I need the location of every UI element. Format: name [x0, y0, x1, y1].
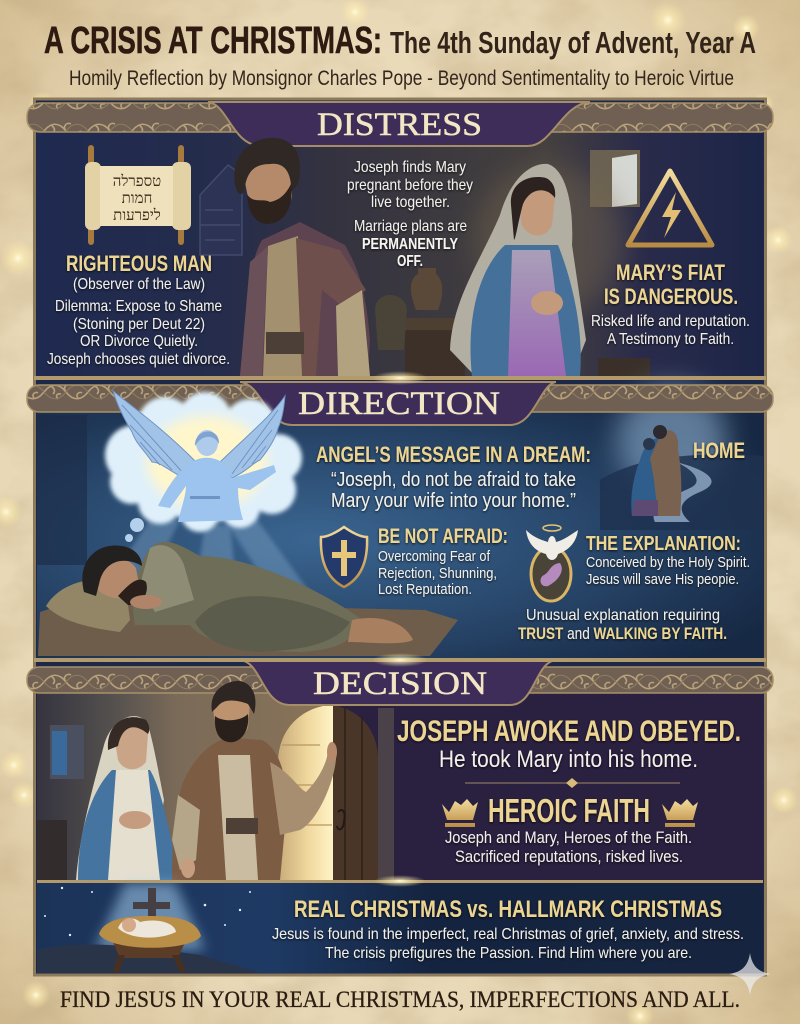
text block: joseph finds mary: live together.	[371, 194, 450, 211]
text block: righteous man: Dilemma: Expose to Shame	[55, 298, 222, 315]
text block: joseph finds mary	[347, 159, 473, 270]
title	[44, 20, 756, 62]
text block: righteous man	[47, 251, 230, 368]
header band	[27, 660, 773, 705]
icon: warning triangle	[628, 171, 712, 245]
section heading: DISTRESS	[317, 107, 482, 143]
footer message: FIND JESUS IN YOUR REAL CHRISTMAS, IMPERFECTIONS AND ALL.	[60, 987, 740, 1012]
icon: manger with baby	[99, 916, 201, 972]
text block: mary's fiat: A Testimony to Faith.	[607, 331, 734, 348]
icon: cross	[133, 888, 170, 925]
panel: distress	[27, 102, 773, 377]
text block: heroes of the faith: Sacrificed reputations, risked lives.	[455, 847, 683, 866]
header band	[27, 382, 773, 425]
text block: mary's fiat: Risked life and reputation.	[591, 313, 750, 330]
outer frame	[34, 99, 766, 975]
text block: angel's message	[316, 442, 591, 512]
decision background	[37, 692, 763, 881]
text block: mary's fiat: MARY’S FIAT	[616, 260, 725, 285]
icon: torah scroll: ליפרעות	[113, 207, 161, 224]
text block: be not afraid	[378, 525, 508, 598]
text block: be not afraid: Lost Reputation.	[378, 581, 472, 598]
text block: joseph awoke: He took Mary into his home.	[439, 746, 698, 773]
icon: torah scroll	[85, 145, 191, 245]
text block: joseph finds mary: Marriage plans are	[354, 218, 467, 235]
icon: dove and locket	[526, 525, 578, 601]
icon: left crown	[442, 799, 478, 827]
text block: trust and walking by faith: TRUST and WALKING BY FAITH.	[518, 624, 727, 643]
title: A CRISIS AT CHRISTMAS:	[44, 20, 382, 62]
text block: mary's fiat	[591, 260, 750, 348]
text block: heroes of the faith: Joseph and Mary, Heroes of the Faith.	[445, 828, 692, 847]
thought bubbles	[125, 518, 144, 542]
text block: the explanation: THE EXPLANATION:	[586, 533, 741, 555]
distress background room	[37, 130, 763, 377]
gold divider line	[34, 653, 766, 667]
ornamental divider	[465, 778, 680, 788]
text block: angel's message: “Joseph, do not be afraid to take	[331, 469, 576, 491]
text block: joseph awoke	[397, 715, 741, 773]
light rays from dream	[70, 510, 330, 640]
text block: righteous man: RIGHTEOUS MAN	[66, 251, 212, 276]
header band	[27, 102, 773, 146]
text block: joseph finds mary: Joseph finds Mary	[354, 159, 466, 176]
text block: trust and walking by faith: Unusual explanation requiring	[526, 607, 720, 624]
figure: mary distressed	[450, 164, 586, 376]
figure: joseph leading mary	[172, 681, 337, 880]
angel wings	[113, 391, 285, 478]
figure: mary at the door	[76, 716, 178, 880]
text block: the explanation: Jesus will save His peopie.	[586, 571, 739, 588]
text block: be not afraid: Overcoming Fear of	[378, 548, 491, 565]
text block: righteous man: (Stoning per Deut 22)	[73, 316, 205, 333]
icon: shield with cross	[321, 527, 367, 587]
icon: right crown	[662, 799, 698, 827]
heading: heroic faith: HEROIC FAITH	[488, 792, 650, 829]
text block: real christmas vs hallmark	[272, 896, 744, 962]
text block: righteous man: OR Divorce Quietly.	[80, 333, 198, 350]
label: home: HOME	[693, 438, 745, 463]
text block: mary's fiat: IS DANGEROUS.	[604, 284, 738, 309]
text block: joseph finds mary: OFF.	[397, 253, 423, 270]
real christmas background	[37, 882, 763, 973]
text block: be not afraid: BE NOT AFRAID:	[378, 525, 508, 548]
text block: heroes of the faith	[445, 828, 692, 866]
text block: joseph finds mary: pregnant before they	[347, 177, 473, 194]
direction background	[37, 385, 763, 658]
section heading: DIRECTION	[298, 386, 500, 422]
figure: embracing couple	[631, 425, 681, 516]
icon: sparkle	[729, 953, 771, 995]
text block: real christmas vs hallmark: Jesus is found in the imperfect, real Christmas of grief, anxiety, and stress.	[272, 926, 744, 943]
text block: real christmas vs hallmark: The crisis prefigures the Passion. Find Him where you are.	[325, 945, 692, 962]
figure: sleeping joseph	[38, 542, 458, 656]
figure: joseph distressed	[234, 138, 370, 376]
text block: angel's message: ANGEL’S MESSAGE IN A DREAM:	[316, 442, 591, 467]
text block: the explanation: Conceived by the Holy Spirit.	[586, 554, 750, 571]
gold divider line	[34, 371, 766, 385]
panel: real christmas	[37, 882, 763, 973]
text block: righteous man: Joseph chooses quiet divorce.	[47, 351, 230, 368]
icon: torah scroll: טספרלה	[113, 173, 161, 190]
text block: joseph finds mary: PERMANENTLY	[362, 236, 458, 253]
text block: trust and walking by faith	[518, 607, 727, 643]
text block: be not afraid: Rejection, Shunning,	[378, 565, 497, 582]
text block: angel's message: Mary your wife into your home.”	[331, 490, 576, 512]
dream cloud with angel	[105, 391, 302, 532]
text block: the explanation	[586, 533, 750, 588]
angel body	[158, 430, 276, 522]
text block: righteous man: (Observer of the Law)	[73, 276, 205, 293]
icon: torah scroll: חמות	[122, 191, 152, 207]
panel: decision	[27, 653, 773, 881]
gold line under decision panel	[37, 875, 763, 887]
panel: direction	[27, 371, 773, 658]
section heading: DECISION	[313, 666, 487, 702]
